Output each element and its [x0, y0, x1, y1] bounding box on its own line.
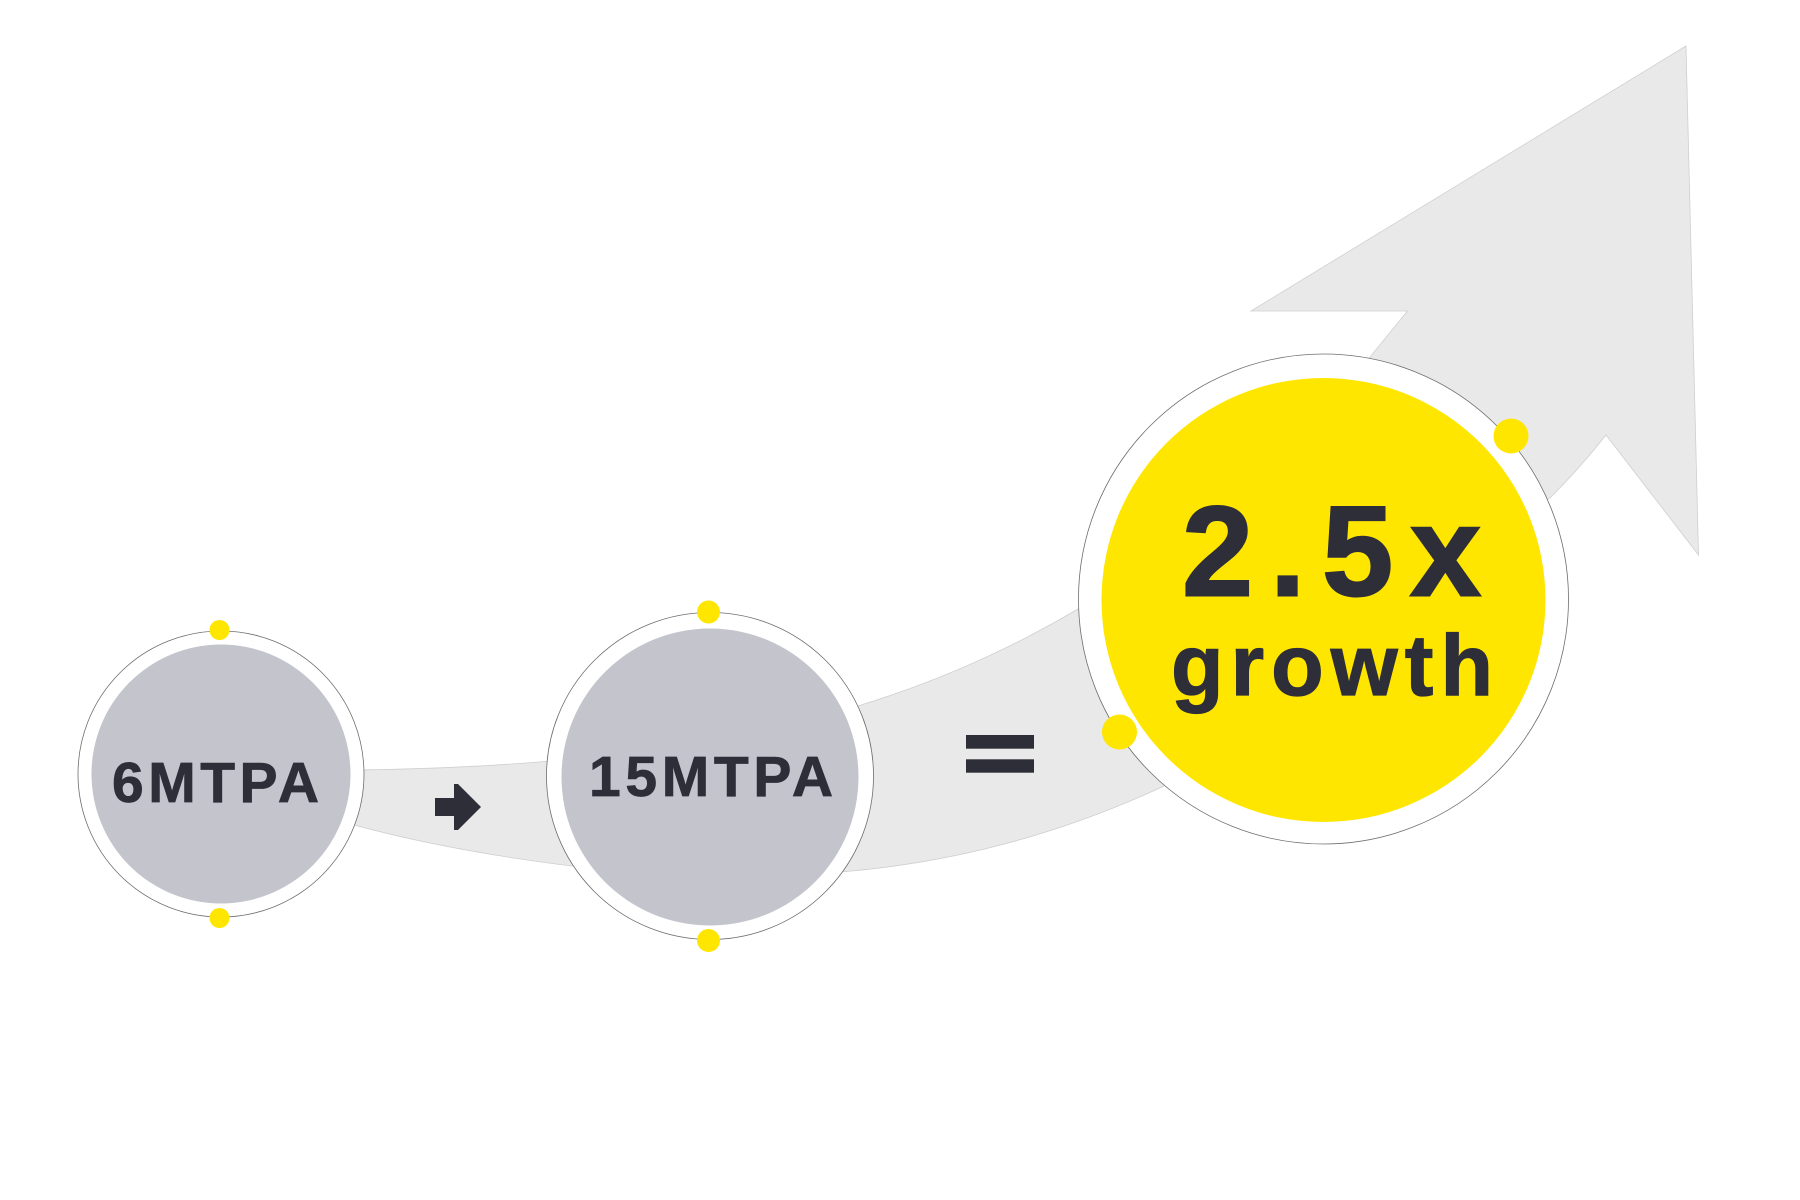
- label: 15MTPA: 15MTPA: [589, 745, 833, 809]
- icon: equals sign: [966, 735, 1034, 773]
- circle: 6MTPA: [78, 620, 364, 928]
- curved growth arrow background: [350, 46, 1698, 872]
- headline: 2.5x: 2.5x: [1182, 480, 1481, 624]
- circle: 15MTPA: [546, 600, 874, 952]
- label: 6MTPA: 6MTPA: [112, 751, 319, 815]
- subheading: growth: growth: [1171, 618, 1493, 714]
- icon: right arrow: [435, 784, 481, 830]
- circle: 2.5x growth: [1078, 354, 1568, 844]
